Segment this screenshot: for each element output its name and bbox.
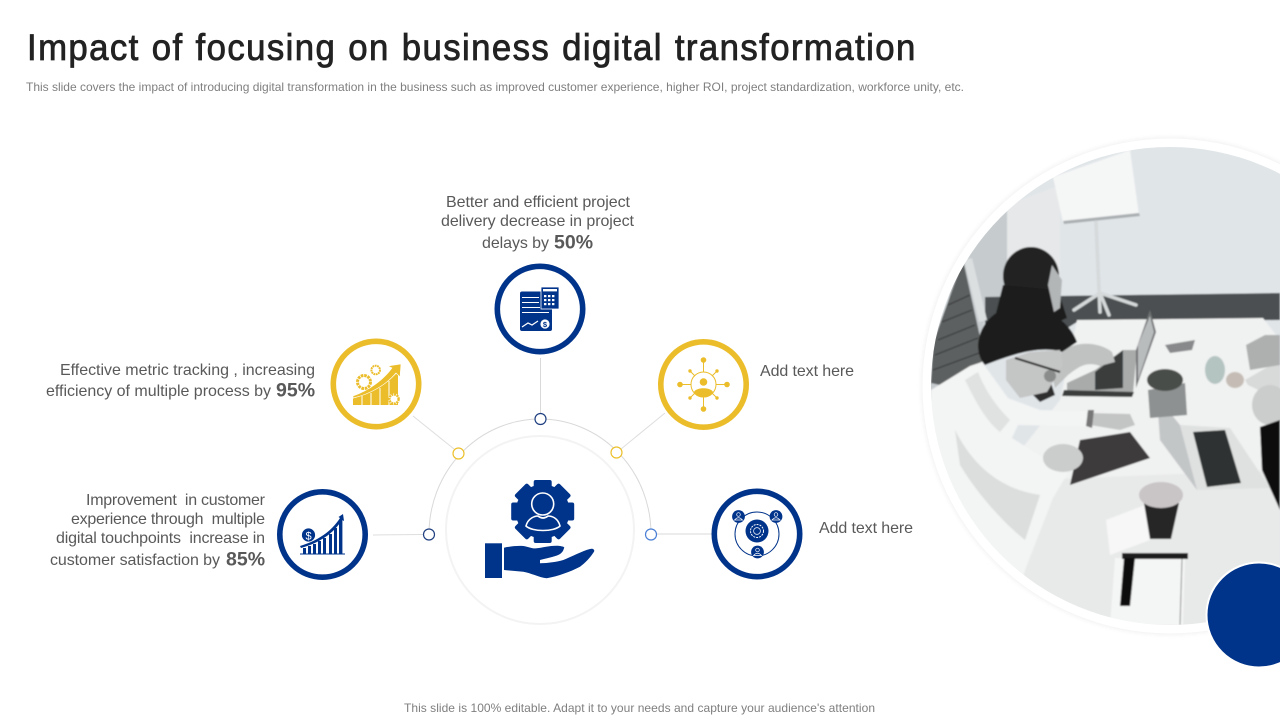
text: top item [441, 194, 635, 254]
text: top item: delivery decrease in project [441, 213, 635, 230]
icon: top, budget report and calculator [497, 266, 583, 352]
photo ring [922, 138, 1280, 634]
man's face [1006, 350, 1063, 398]
text: upper left item: Effective metric tracking , increasing [60, 362, 315, 379]
icon: top, budget report and calculator: $ [543, 320, 548, 329]
text: lower left item: digital touchpoints increase in [56, 530, 265, 547]
text: lower right item: Add text here [819, 520, 913, 537]
wall [932, 147, 1280, 566]
node: upper right [611, 447, 622, 458]
icon: upper left, growth chart with gears [333, 341, 419, 427]
tablet [1070, 432, 1150, 485]
icon: hand holding gear with person [485, 480, 594, 578]
connector: top [540, 358, 542, 413]
node: upper left [453, 448, 464, 459]
woman [1002, 246, 1060, 290]
connector: lower left [373, 534, 423, 536]
right person [1246, 365, 1280, 390]
text: upper right item: Add text here [760, 363, 854, 380]
hub connector arc [429, 419, 651, 534]
text: upper left item: 95% [276, 380, 315, 402]
text: lower left item: 85% [226, 548, 265, 570]
text: upper left item [46, 362, 315, 402]
text: top item: Better and efficient project [446, 194, 631, 211]
laptop two [1180, 425, 1270, 490]
chair [931, 260, 985, 385]
connector: upper right [621, 413, 665, 449]
photo: team meeting around table [925, 140, 1280, 640]
table [1025, 316, 1275, 478]
man's watch and hand [1087, 413, 1135, 430]
connector: upper left [413, 416, 454, 449]
text: top item: 50% [554, 232, 593, 254]
flipchart [1053, 150, 1139, 223]
title: Impact of focusing on business digital transformation [27, 27, 915, 68]
woman's arm [1050, 344, 1115, 388]
node: top [535, 414, 546, 424]
icon: lower right, team around gear [714, 491, 800, 577]
man's shirt [931, 362, 1063, 574]
text: top item: delays by [482, 235, 549, 252]
text: lower left item: customer satisfaction by [50, 552, 220, 569]
node: lower right [646, 529, 656, 540]
notebook [1110, 558, 1185, 625]
footer note: This slide is 100% editable. Adapt it to your needs and capture your audience's attention [404, 701, 875, 715]
text: lower left item: Improvement in customer [86, 492, 266, 509]
text: lower left item: experience through multiple [71, 511, 265, 528]
central hub circle [446, 436, 634, 624]
mugs [1205, 356, 1225, 384]
icon: upper right, person network [661, 342, 746, 427]
laptop one [1067, 350, 1137, 393]
connector: lower right [657, 533, 712, 535]
icon: lower left, dollar growth chart [280, 492, 365, 577]
text: lower left item [50, 492, 266, 570]
man's hair [978, 314, 1078, 366]
pencil cup and paper [1106, 505, 1150, 555]
icon: lower left, dollar growth chart: $ [305, 530, 312, 542]
subtitle: This slide covers the impact of introducing digital transformation in the business such as improved customer experience, higher ROI, project standardization, workforce unity, etc. [26, 80, 964, 94]
node: lower left [424, 529, 434, 540]
accent blue circle [1206, 562, 1280, 668]
text: upper left item: efficiency of multiple process by [46, 383, 271, 400]
floor [984, 292, 1280, 328]
plant box [1148, 383, 1187, 418]
